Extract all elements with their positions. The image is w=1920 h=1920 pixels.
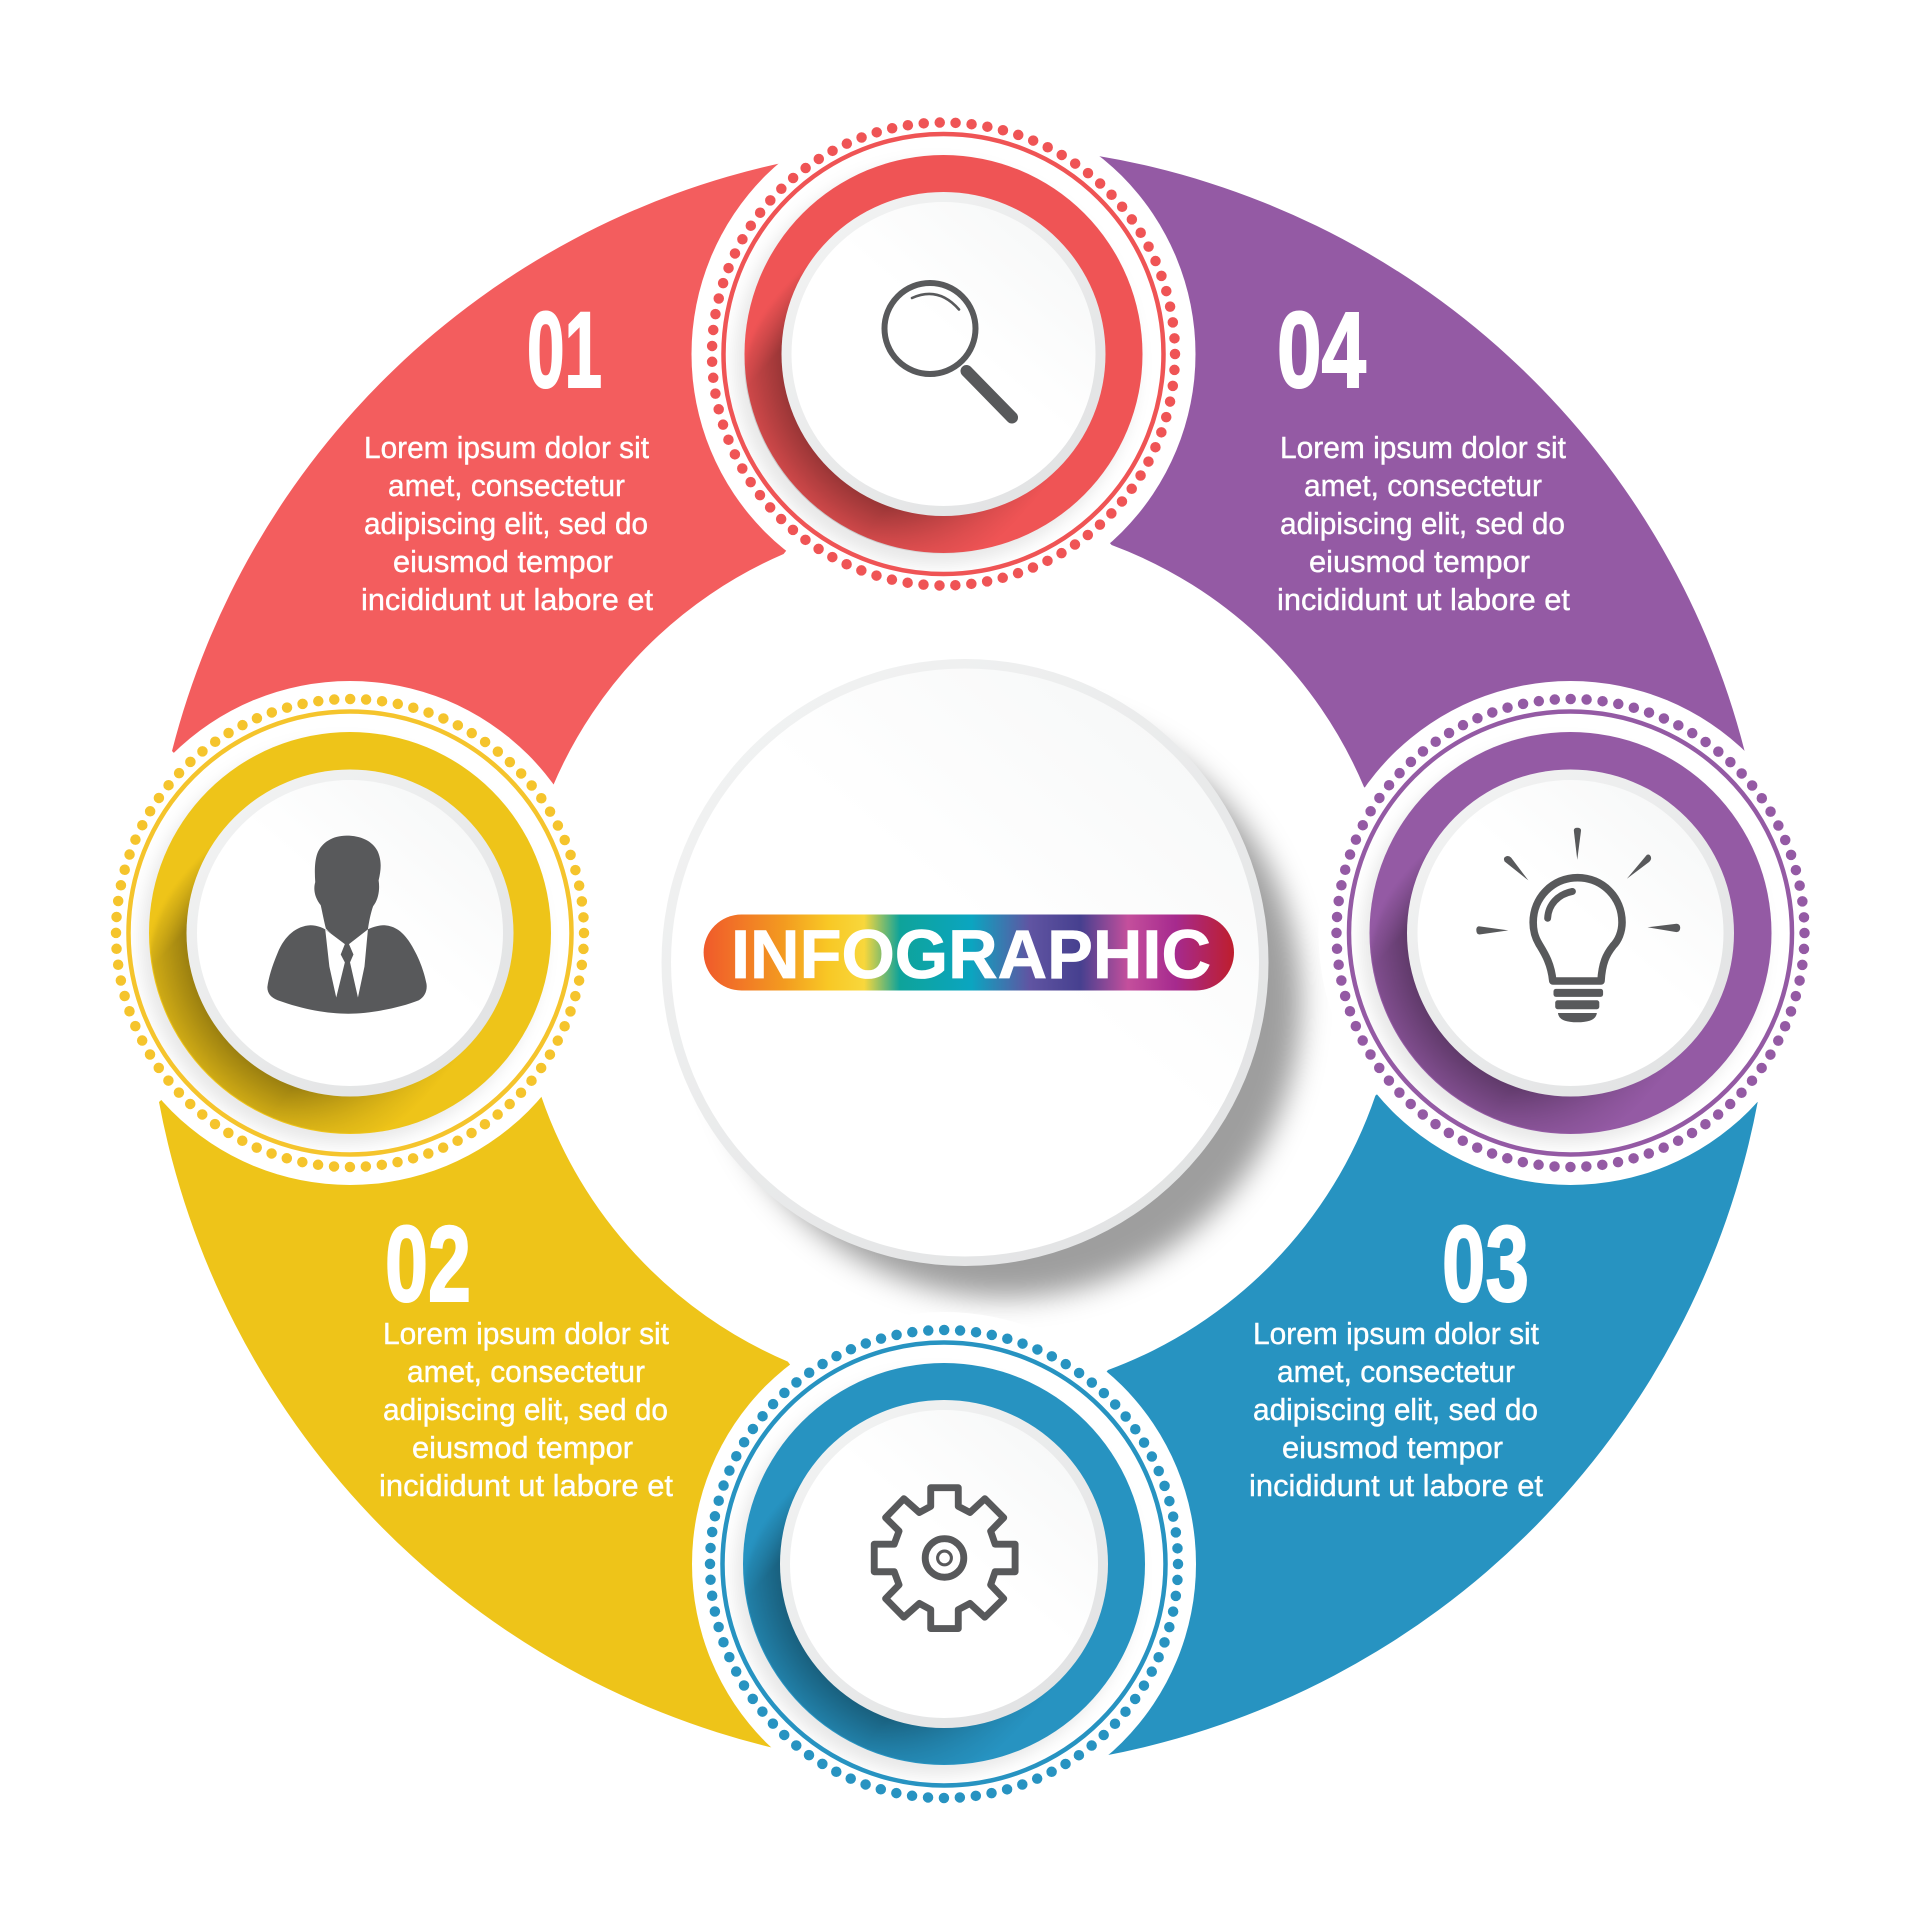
number 02: 02 xyxy=(385,1203,471,1324)
badge: left yellow with person xyxy=(98,681,602,1185)
segment shape: red xyxy=(172,163,944,933)
panel: step 02 yellow segment xyxy=(159,933,944,1748)
text block 01: incididunt ut labore et xyxy=(361,582,653,617)
text block 01: Lorem ipsum dolor sit xyxy=(364,430,649,465)
text block 03 xyxy=(1249,1316,1543,1503)
text block 04: adipiscing elit, sed do xyxy=(1280,506,1565,541)
badge: right purple with light bulb xyxy=(1318,681,1822,1185)
number 04: 04 xyxy=(1277,289,1366,410)
number 01: 01 xyxy=(527,289,602,410)
icon: light bulb xyxy=(1476,828,1680,1022)
center disc shadow xyxy=(709,706,1301,1298)
text block 03: Lorem ipsum dolor sit xyxy=(1253,1316,1539,1351)
text block 02: amet, consectetur xyxy=(407,1354,645,1389)
panel: center disc xyxy=(662,659,1268,1266)
segment shape: yellow xyxy=(159,933,944,1748)
text block 03: adipiscing elit, sed do xyxy=(1253,1392,1538,1427)
segment shape: blue xyxy=(944,933,1758,1756)
text block 04: incididunt ut labore et xyxy=(1277,582,1570,617)
badge: bottom blue with gear xyxy=(692,1312,1196,1816)
text block 02: incididunt ut labore et xyxy=(379,1468,673,1503)
title pill: INFOGRAPHIC: INFOGRAPHIC xyxy=(731,916,1211,993)
text block 02: adipiscing elit, sed do xyxy=(383,1392,668,1427)
text block 02: Lorem ipsum dolor sit xyxy=(383,1316,669,1351)
text block 04: amet, consectetur xyxy=(1304,468,1542,503)
panel: step 04 purple segment xyxy=(944,156,1745,933)
text block 01: amet, consectetur xyxy=(388,468,625,503)
text block 01: adipiscing elit, sed do xyxy=(364,506,648,541)
badge: top red with magnifier xyxy=(692,102,1196,606)
text block 04 xyxy=(1277,430,1570,617)
icon: businessman xyxy=(267,836,427,1014)
text block 03: eiusmod tempor xyxy=(1282,1430,1503,1465)
text block 04: eiusmod tempor xyxy=(1309,544,1530,579)
text block 03: amet, consectetur xyxy=(1277,1354,1515,1389)
text block 02: eiusmod tempor xyxy=(412,1430,633,1465)
text block 01: eiusmod tempor xyxy=(393,544,613,579)
icon: gear xyxy=(874,1488,1015,1629)
text block 02 xyxy=(379,1316,673,1503)
text block 01 xyxy=(361,430,653,617)
segment shape: purple xyxy=(944,156,1745,933)
panel: step 03 blue segment xyxy=(944,933,1758,1756)
text block 04: Lorem ipsum dolor sit xyxy=(1280,430,1566,465)
icon: magnifier xyxy=(884,283,1012,418)
panel: step 01 red segment xyxy=(172,163,944,933)
text block 03: incididunt ut labore et xyxy=(1249,1468,1543,1503)
number 03: 03 xyxy=(1442,1203,1529,1324)
